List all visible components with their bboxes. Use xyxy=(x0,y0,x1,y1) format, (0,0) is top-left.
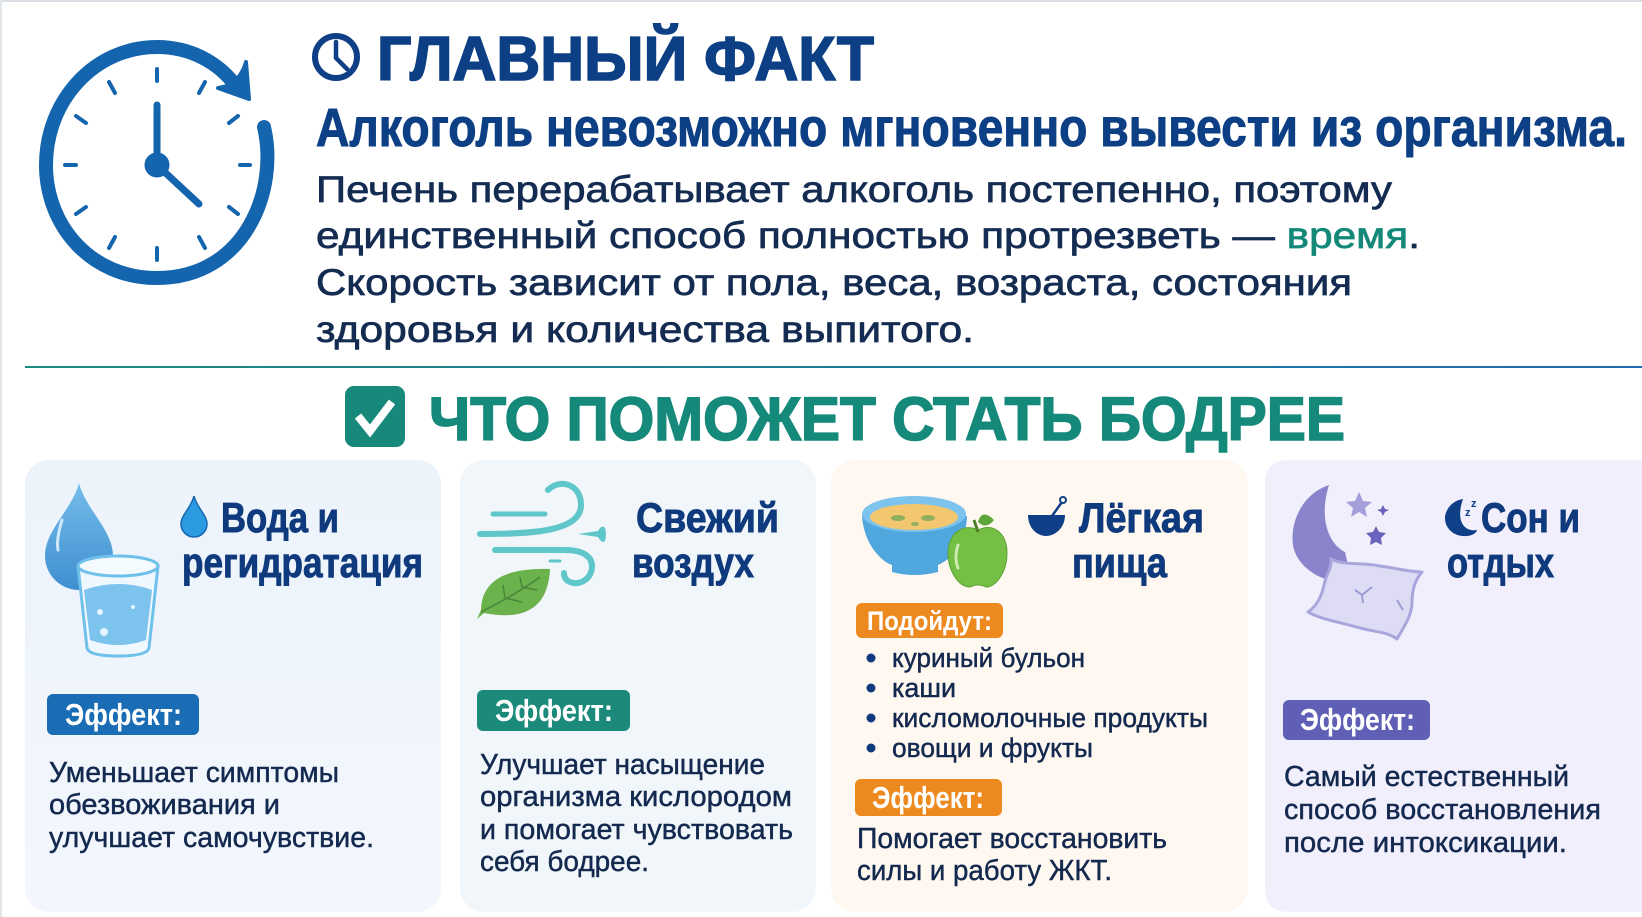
text: эффект воды: обезвоживания и xyxy=(49,789,280,821)
text block: explanation: Печень перерабатывает алкоголь постепенно, поэтому xyxy=(316,169,1393,210)
text: эффект воздуха: организма кислородом xyxy=(480,781,792,813)
text: эффект сна xyxy=(1284,761,1601,859)
list: подходящие продукты: каши xyxy=(892,673,956,703)
card heading: воздух: Свежий xyxy=(636,494,779,541)
text: эффект воздуха: и помогает чувствовать xyxy=(480,814,793,846)
text: эффект сна: Самый естественный xyxy=(1284,761,1569,793)
badge: эффект: Эффект: xyxy=(1300,702,1415,737)
text: эффект воздуха: Улучшает насыщение xyxy=(480,749,765,781)
badge: эффект: Эффект: xyxy=(872,780,984,815)
list: подходящие продукты: куриный бульон xyxy=(892,643,1085,673)
icon: moon, stars and pillow xyxy=(1292,485,1422,639)
badge: эффект: Эффект: xyxy=(65,697,182,732)
text: эффект воздуха: себя бодрее. xyxy=(480,846,649,878)
card heading: воздух: воздух xyxy=(632,539,755,586)
text block: explanation: здоровья и количества выпитого. xyxy=(316,309,974,350)
text: эффект сна: способ восстановления xyxy=(1284,794,1601,826)
icon: soup bowl and apple xyxy=(862,496,1007,587)
icon: small clock in heading xyxy=(315,36,357,78)
panel: свежий воздух xyxy=(460,460,816,912)
panel: лёгкая пища xyxy=(831,460,1248,912)
heading: что поможет стать бодрее: ЧТО ПОМОЖЕТ СТАТЬ БОДРЕЕ xyxy=(429,385,1345,453)
card heading: вода: регидратация xyxy=(182,539,423,586)
panel: сон и отдых xyxy=(1265,460,1642,912)
text: эффект сна: после интоксикации. xyxy=(1284,827,1567,859)
text block: explanation: Скорость зависит от пола, веса, возраста, состояния xyxy=(316,262,1352,303)
title: главный факт: ГЛАВНЫЙ ФАКТ xyxy=(377,24,874,94)
text block: explanation xyxy=(316,169,1420,350)
text block: explanation: единственный способ полностью протрезветь — время . xyxy=(316,215,1420,256)
badge: подойдут: Подойдут: xyxy=(867,606,992,636)
icon: small moon with zzz: z xyxy=(1471,498,1477,510)
icon: small drop xyxy=(181,496,207,537)
card heading: сон: отдых xyxy=(1447,539,1555,586)
icon: small moon with zzz xyxy=(1445,498,1477,536)
card heading: сон xyxy=(1447,494,1580,586)
panel: вода и регидратация xyxy=(25,460,441,912)
card heading: пища xyxy=(1072,494,1204,586)
card heading: вода: Вода и xyxy=(221,494,339,541)
list: подходящие продукты xyxy=(866,643,1208,763)
card heading: вода xyxy=(182,494,423,586)
text: эффект воздуха xyxy=(480,749,793,878)
list: подходящие продукты: овощи и фрукты xyxy=(892,733,1093,763)
icon: small moon with zzz: z xyxy=(1465,507,1471,519)
icon: green check box xyxy=(345,386,405,447)
card heading: сон: Сон и xyxy=(1481,494,1580,541)
icon: wind and leaf xyxy=(477,484,606,619)
text: эффект воды: Уменьшает симптомы xyxy=(49,757,339,789)
icon: water drop and glass xyxy=(45,483,158,656)
card heading: воздух xyxy=(632,494,779,586)
text: эффект воды xyxy=(49,757,374,854)
text: эффект пищи: Помогает восстановить xyxy=(857,823,1167,855)
text: эффект воды: улучшает самочувствие. xyxy=(49,822,374,854)
icon: clock with circular arrow xyxy=(46,47,267,278)
icon: small bowl with spoon xyxy=(1028,497,1066,536)
badge: эффект: Эффект: xyxy=(495,693,613,728)
card heading: пища: пища xyxy=(1072,539,1168,586)
text: эффект пищи xyxy=(857,823,1167,887)
card heading: пища: Лёгкая xyxy=(1079,494,1204,541)
text: эффект пищи: силы и работу ЖКТ. xyxy=(857,855,1112,887)
list: подходящие продукты: кисломолочные продукты xyxy=(892,703,1208,733)
